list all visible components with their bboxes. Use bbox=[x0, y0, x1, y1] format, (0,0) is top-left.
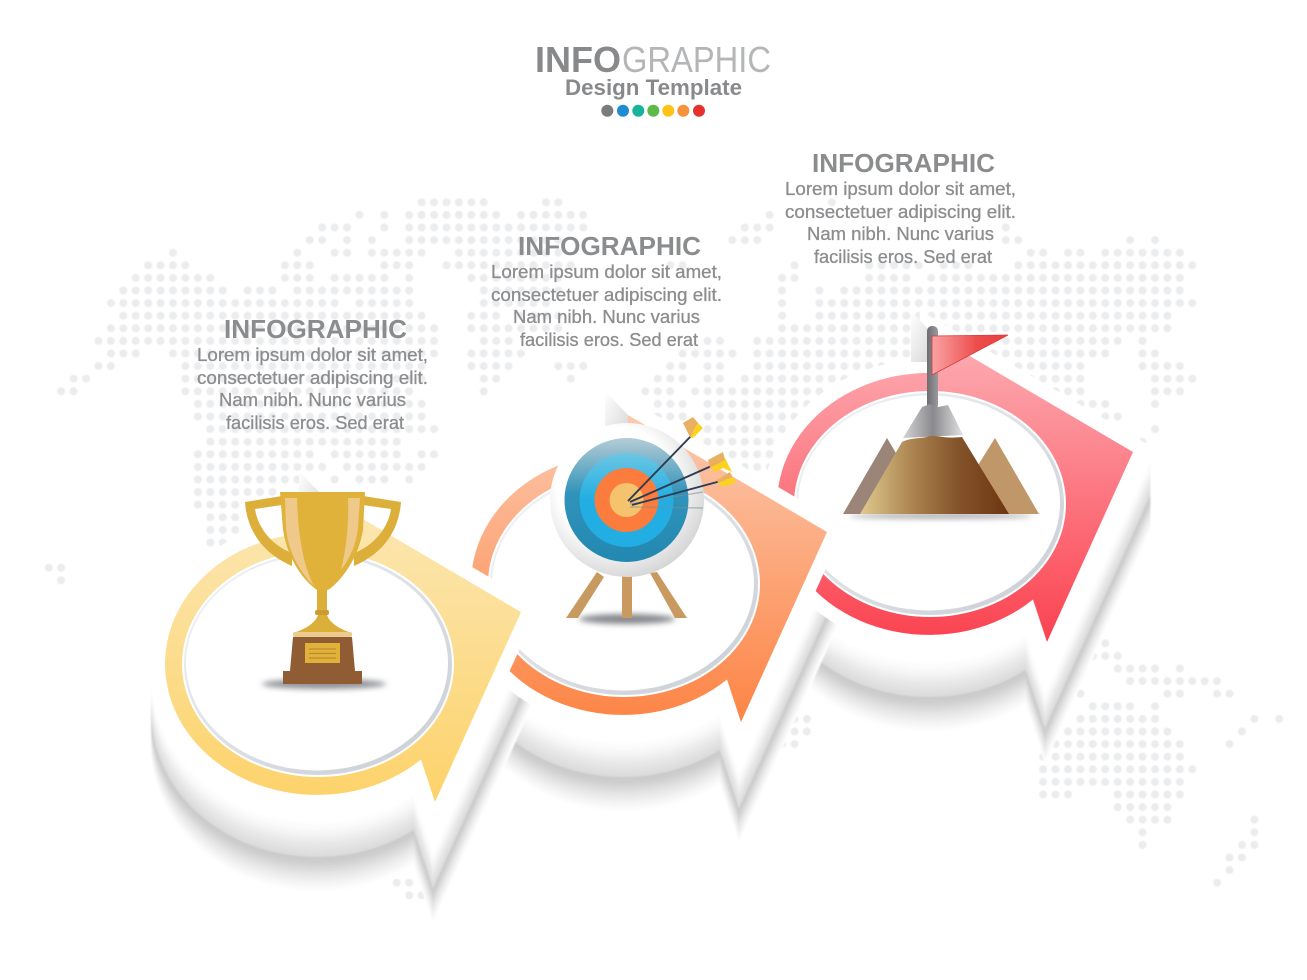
main title: GRAPHIC bbox=[622, 39, 771, 80]
text block: step 1: INFOGRAPHIC bbox=[224, 316, 407, 344]
text block: step 1: consectetuer adipiscing elit. bbox=[197, 368, 428, 388]
text block: step 1: facilisis eros. Sed erat bbox=[226, 413, 404, 433]
text block: step 3: Nam nibh. Nunc varius bbox=[807, 224, 994, 244]
panel: yellow step arrow bbox=[165, 471, 521, 802]
text block: step 1: Nam nibh. Nunc varius bbox=[219, 390, 406, 410]
text block: step 2: facilisis eros. Sed erat bbox=[520, 330, 698, 350]
text block: step 2: Lorem ipsum dolor sit amet, bbox=[491, 262, 722, 282]
icon: target with arrows bbox=[550, 417, 736, 624]
icon: trophy bbox=[245, 492, 401, 689]
text block: step 3: Lorem ipsum dolor sit amet, bbox=[785, 179, 1016, 199]
text block: step 3 bbox=[785, 150, 1016, 267]
text block: step 2 bbox=[491, 233, 722, 350]
panel: red step arrow bbox=[777, 311, 1133, 642]
text block: step 2: Nam nibh. Nunc varius bbox=[513, 307, 700, 327]
colour dots under title bbox=[601, 105, 705, 117]
icon: mountain with flag bbox=[843, 326, 1039, 518]
text block: step 3: INFOGRAPHIC bbox=[812, 150, 995, 178]
main title bbox=[535, 39, 771, 100]
panel: orange step arrow bbox=[471, 391, 827, 722]
text block: step 2: INFOGRAPHIC bbox=[518, 233, 701, 261]
text block: step 1 bbox=[197, 316, 428, 433]
text block: step 1: Lorem ipsum dolor sit amet, bbox=[197, 345, 428, 365]
world map dot background bbox=[49, 202, 1280, 895]
main title: Design Template bbox=[565, 75, 742, 100]
main title: INFO bbox=[535, 39, 621, 80]
text block: step 3: facilisis eros. Sed erat bbox=[814, 247, 992, 267]
text block: step 2: consectetuer adipiscing elit. bbox=[491, 285, 722, 305]
text block: step 3: consectetuer adipiscing elit. bbox=[785, 202, 1016, 222]
extrusion: red step bbox=[777, 338, 1133, 726]
extrusion: orange step bbox=[471, 418, 827, 806]
extrusion: yellow step bbox=[165, 498, 521, 886]
